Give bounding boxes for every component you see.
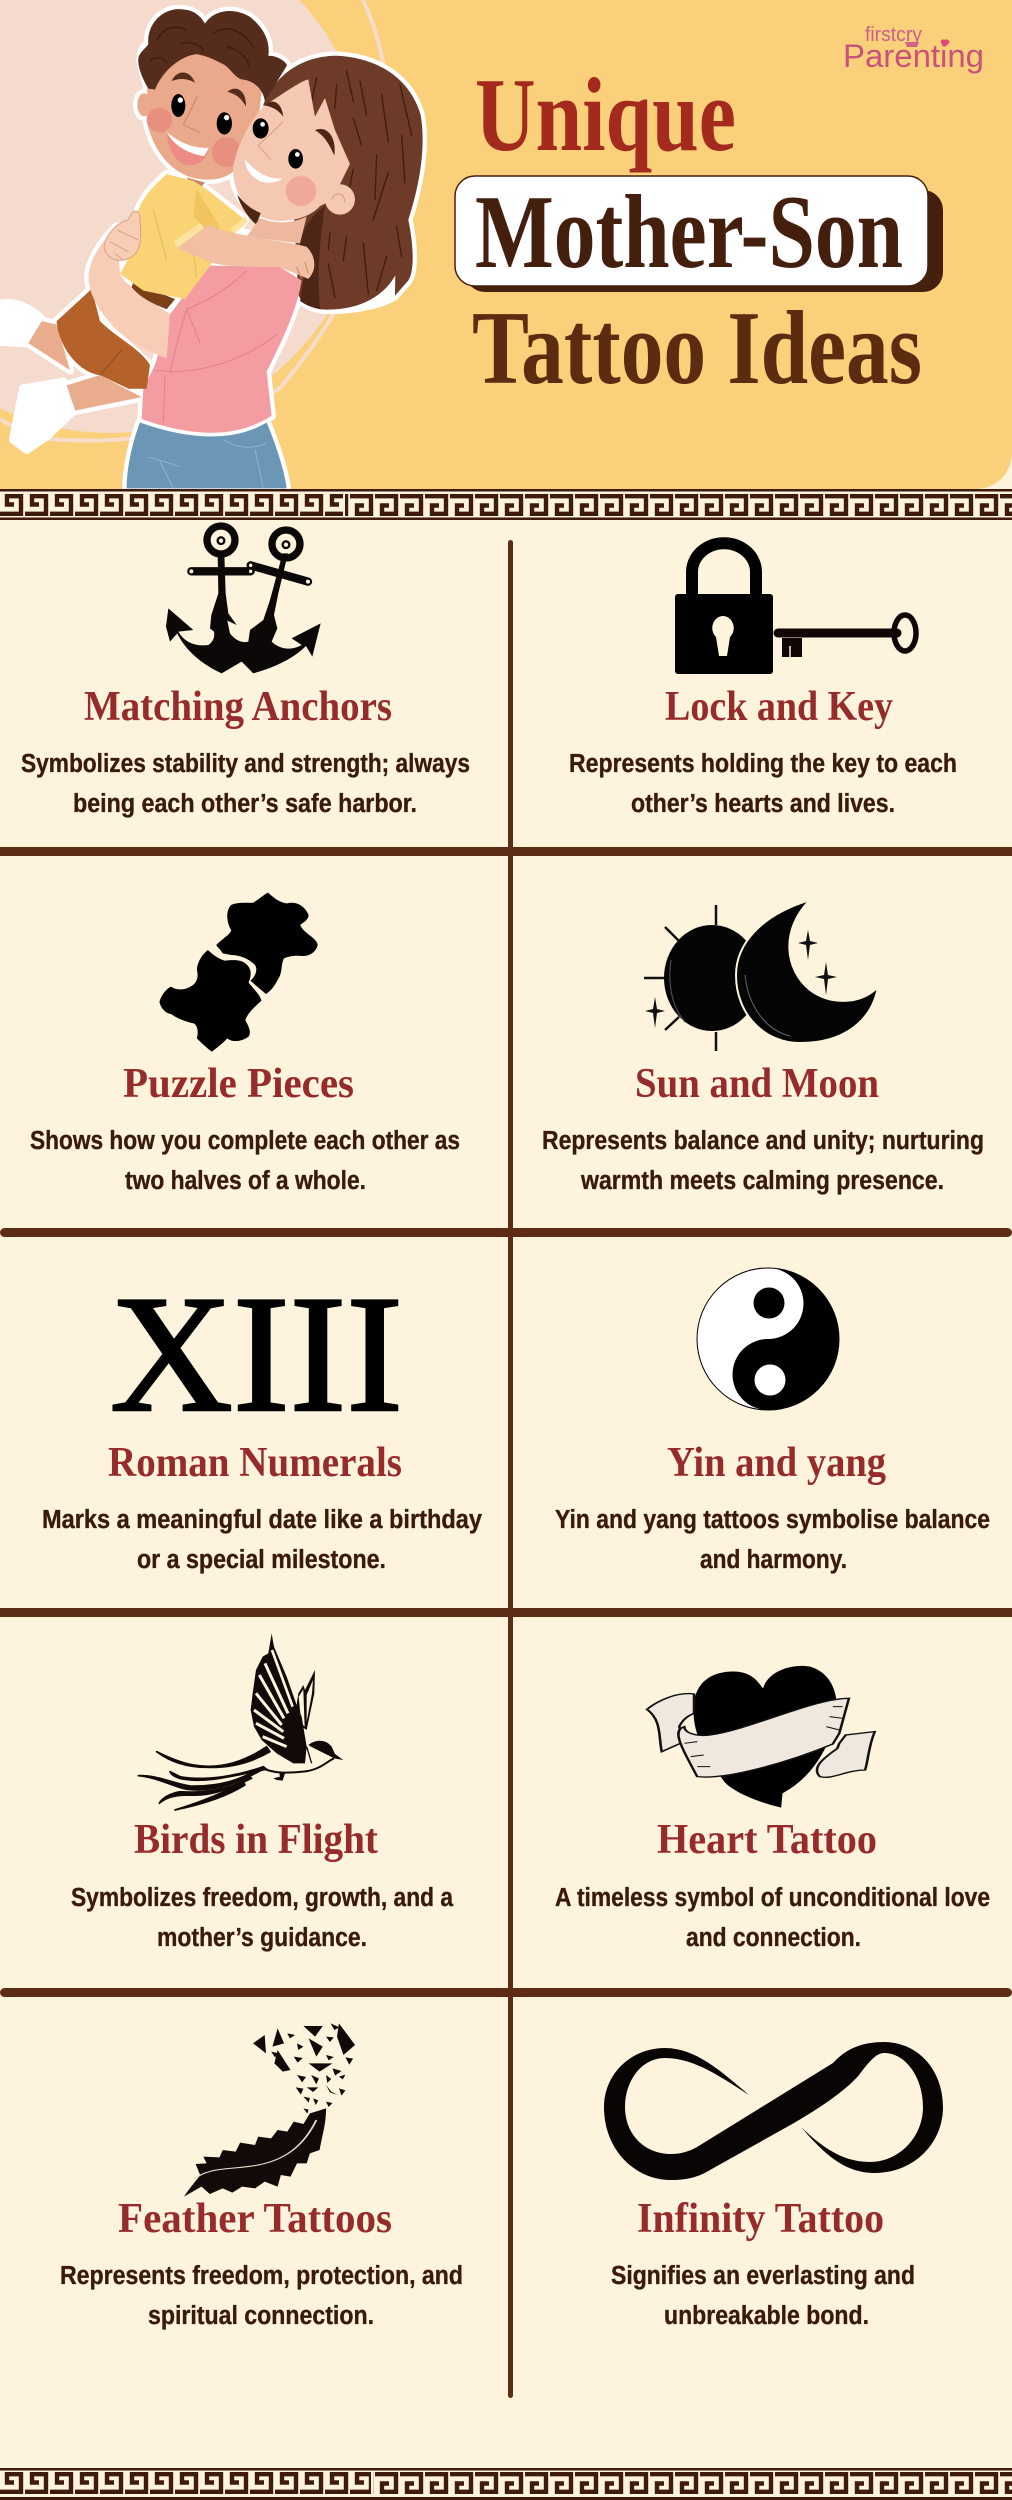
socks [0,303,42,343]
boy mouth [167,132,209,165]
mother hair [263,56,423,310]
description: two halves of a whole. [125,1167,366,1195]
description [30,1127,460,1195]
heading: Infinity Tattoo [637,2196,884,2242]
panel: sun and moon [542,900,984,1195]
description: warmth meets calming presence. [580,1167,944,1195]
icon: infinity symbol [604,2042,943,2180]
boy cheeks [147,108,172,132]
boy hair [138,9,287,101]
heading: Puzzle Pieces [123,1061,354,1107]
mother hand [104,211,141,260]
pale ring [0,0,388,441]
heading: Matching Anchors [84,684,392,730]
icon: feather with birds [184,2023,355,2197]
panel: yin and yang [555,1268,990,1574]
description: Signifies an everlasting and [611,2262,915,2290]
icon: lock and key [675,543,916,674]
icon: yin yang [697,1268,839,1410]
icon: sun and moon [644,900,878,1051]
panel: lock and key [569,543,957,818]
boy shirt [132,282,175,309]
heading: Lock and Key [665,684,893,730]
heading: Feather Tattoos [118,2196,392,2242]
title line: Unique: Unique [475,56,736,173]
description [60,2262,463,2330]
panel: heart tattoo [555,1666,990,1952]
header panel [0,0,1012,489]
panel: puzzle pieces [30,893,460,1195]
boy eyes [171,94,185,117]
icon: XIII numeral: XIII [110,1262,403,1447]
highlight box with Mother-Son: Mother-Son [475,173,903,290]
icon: anchors [166,526,321,673]
description: Shows how you complete each other as [30,1127,460,1155]
description: unbreakable bond. [664,2302,869,2330]
panel: matching anchors [21,526,470,818]
description [555,1506,990,1574]
panel: infinity tattoo [604,2042,943,2330]
vertical divider [508,540,513,2398]
description: or a special milestone. [137,1546,386,1574]
mother smile [244,159,283,183]
boy nose [183,96,200,132]
description [569,750,957,818]
top greek key border [0,489,1012,520]
panel: birds in flight [71,1633,454,1952]
description: spiritual connection. [148,2302,374,2330]
heading: Sun and Moon [635,1061,879,1107]
logo: firstcry parenting: Parenting [843,38,984,74]
row dividers [0,847,1012,1997]
boy shorts [57,289,150,389]
heading: Roman Numerals [108,1440,402,1486]
icon: puzzle pieces [159,893,318,1052]
description [542,1127,984,1195]
icon: bird [138,1633,343,1810]
panel: feather tattoos [60,2023,463,2330]
title line: Tattoo Ideas: Tattoo Ideas [472,289,922,406]
mother neck [247,216,307,243]
panel: roman numerals [42,1262,483,1574]
jeans [127,422,287,488]
heading: Yin and yang [667,1440,886,1486]
description: Symbolizes freedom, growth, and a [71,1884,454,1912]
logo: firstcry parenting: firstcry [865,24,922,46]
title [455,56,943,406]
header background [0,0,1012,489]
icon: heart with ribbon [647,1666,875,1808]
mother eyes [253,118,269,139]
description: mother’s guidance. [157,1924,367,1952]
description: and connection. [686,1924,861,1952]
feather quill [194,2120,316,2180]
boy neck and head [147,44,267,180]
description: Represents freedom, protection, and [60,2262,463,2290]
mother face [233,79,350,221]
mother nose [258,122,283,160]
description: and harmony. [700,1546,847,1574]
boy arm [177,225,314,279]
heading: Birds in Flight [134,1817,378,1863]
description: being each other’s safe harbor. [73,790,417,818]
pale background circle [0,0,368,433]
description: other’s hearts and lives. [631,790,895,818]
mother shirt [142,265,302,433]
boy legs [28,321,70,370]
flock of birds [253,2023,355,2118]
description [555,1884,990,1952]
description: Marks a meaningful date like a birthday [42,1506,483,1534]
description [71,1884,454,1952]
description [611,2262,915,2330]
description: Represents holding the key to each [569,750,957,778]
bottom greek key border [0,2468,1012,2500]
illustration: mother hugging son [0,9,423,488]
mother arm [88,226,170,358]
description [42,1506,483,1574]
mother brows [265,102,283,117]
mother cheek [286,176,316,206]
mother ear [325,184,355,215]
boy brows [172,72,195,83]
heading: Heart Tattoo [657,1817,877,1863]
logo: firstcry parenting [843,24,984,74]
description [21,750,470,818]
mother hair under chin [237,194,261,225]
feather body [184,2108,326,2197]
description: Symbolizes stability and strength; always [21,750,470,778]
